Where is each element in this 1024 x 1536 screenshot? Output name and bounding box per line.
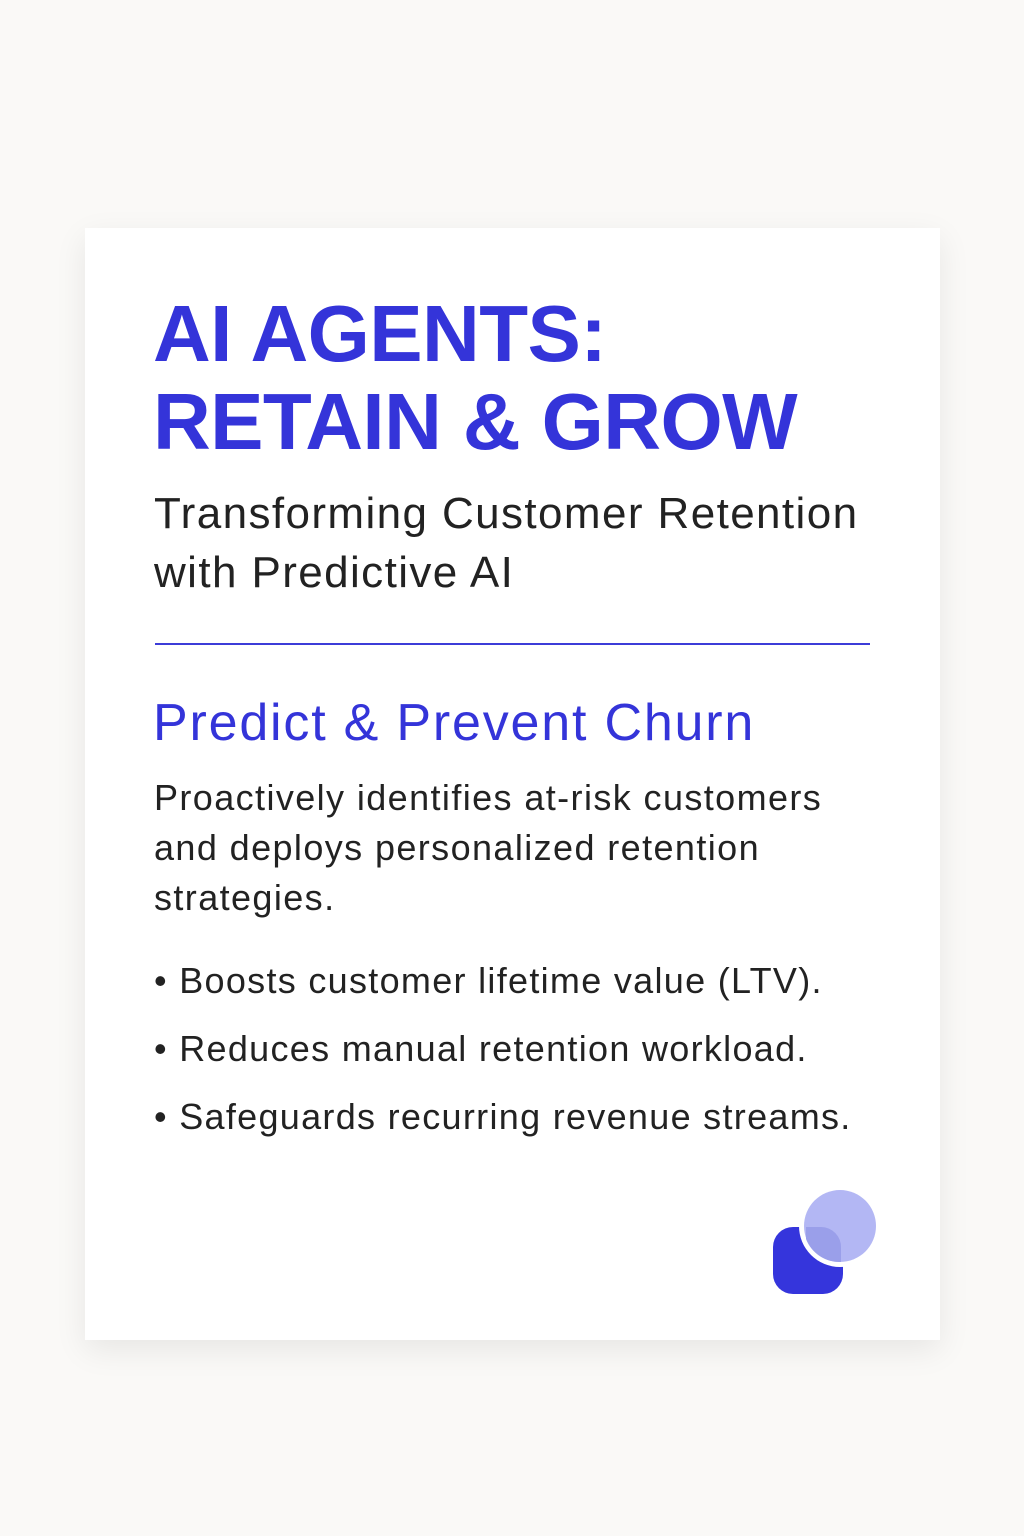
bullet list: • Boosts customer lifetime value (LTV). — [154, 960, 823, 1001]
body text — [154, 777, 822, 918]
subtitle — [154, 489, 858, 597]
body text: strategies. — [154, 877, 335, 918]
bullet list: • Safeguards recurring revenue streams. — [154, 1096, 852, 1137]
divider — [155, 643, 870, 645]
subtitle: Transforming Customer Retention — [154, 489, 858, 538]
bullet list: • Reduces manual retention workload. — [154, 1028, 808, 1069]
bullet list — [154, 960, 852, 1137]
title — [153, 289, 798, 466]
title: AI AGENTS: — [153, 289, 606, 378]
body text: and deploys personalized retention — [154, 827, 760, 868]
title: RETAIN & GROW — [153, 377, 797, 466]
body text: Proactively identifies at-risk customers — [154, 777, 822, 818]
panel: card — [85, 228, 940, 1340]
heading: Predict & Prevent Churn — [153, 694, 755, 752]
icon: logo — [773, 1190, 876, 1294]
subtitle: with Predictive AI — [154, 548, 514, 597]
